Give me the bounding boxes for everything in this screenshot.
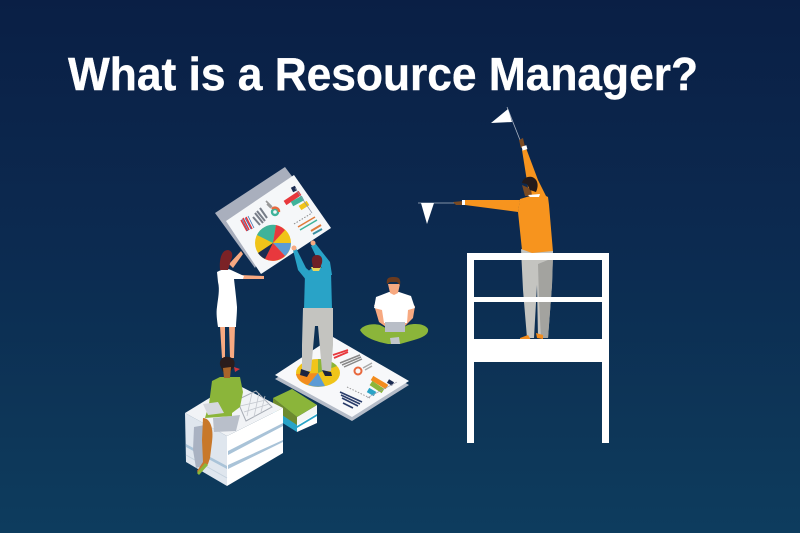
- icon: book stack: [273, 389, 317, 432]
- panel: white platform: [467, 253, 609, 443]
- title: What is a Resource Manager?: [68, 48, 698, 100]
- chart: bars on floor sheet: [333, 350, 397, 408]
- figure: man in orange signalling with flags: [418, 107, 553, 341]
- icon: stack of paper: [185, 383, 283, 486]
- figure: man sitting cross-legged: [360, 277, 428, 344]
- figure: woman sitting with laptop: [193, 357, 243, 475]
- panel: raised chart sheet: [215, 167, 331, 274]
- icon: lowered white flag: [418, 203, 456, 224]
- chart: small bars on raised sheet: [241, 201, 322, 234]
- chart: pie on floor sheet: [296, 359, 340, 387]
- figure: man in blue sweater: [292, 240, 333, 377]
- figure: woman in white dress: [217, 250, 264, 358]
- chart: bars on raised sheet: [285, 188, 312, 213]
- icon: raised white flag: [491, 107, 520, 140]
- panel: sheet on floor: [275, 337, 409, 421]
- chart: pie on raised sheet: [255, 225, 291, 261]
